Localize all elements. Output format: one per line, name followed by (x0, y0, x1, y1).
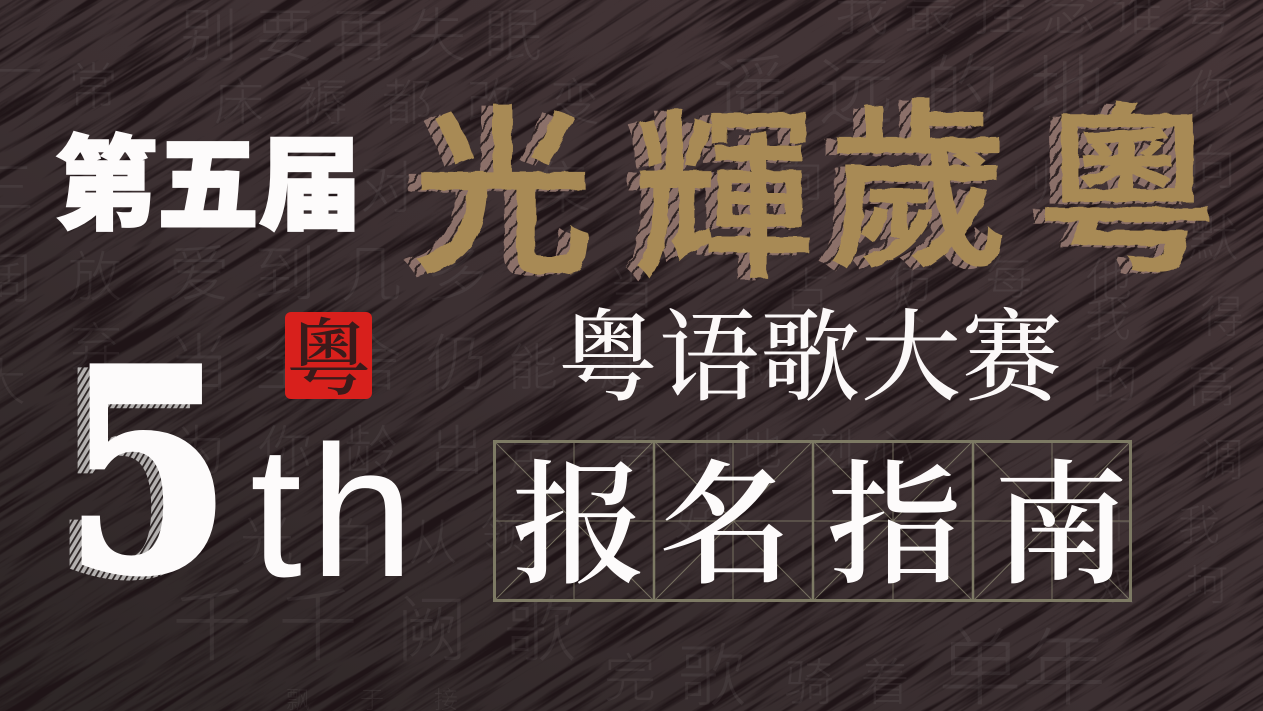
background: ghost lyric characters: 歌 (504, 591, 576, 671)
background: ghost lyric characters: 弃 (70, 320, 122, 378)
heading: 报名指南: 名 (659, 453, 793, 601)
background: ghost lyric characters: 当 (608, 262, 654, 314)
background: ghost lyric characters: 你 (1188, 66, 1234, 118)
background: ghost lyric characters: 好 (675, 496, 719, 545)
background: ghost lyric characters: 集 (535, 157, 591, 220)
background: ghost lyric characters: 能 (508, 340, 558, 396)
background: ghost lyric characters: 我 (1178, 502, 1220, 549)
background: ghost lyric characters: 光 (240, 512, 294, 572)
background: ghost lyric characters: 龄 (344, 422, 398, 482)
heading: 第五届: 第五届 (55, 129, 361, 243)
red seal with 粵: 粵 (286, 314, 371, 407)
background: ghost lyric characters: 完 (604, 651, 656, 709)
background: ghost lyric characters: 遥远的地 (712, 50, 1136, 135)
background: ghost lyric characters: 千千 (172, 582, 384, 671)
subtitle: 粤语歌大赛: 粤语歌大赛 (558, 303, 1065, 414)
title shadow: 粵 (1024, 93, 1206, 297)
heading: 报名指南 (512, 453, 1128, 601)
background: ghost lyric characters: 他 (1086, 254, 1132, 306)
heading: 报名指南: 报 (512, 453, 646, 601)
big numeral 5 with hatched shadow: 5 (52, 311, 220, 640)
background: ghost lyric characters: 就 (740, 338, 786, 390)
main title: 光輝歲粵 with hatched shadow (400, 87, 1218, 303)
background: ghost lyric characters: 别要再失眠 (180, 4, 560, 69)
background: ghost lyric characters: 坷 (1186, 562, 1228, 609)
background: ghost lyric characters: 为 (172, 422, 226, 482)
heading: 报名指南: 南 (994, 453, 1128, 601)
background: ghost lyric characters: 双 (1095, 565, 1135, 609)
title face (412, 87, 1218, 301)
background: ghost lyric characters: 地 (738, 426, 782, 475)
background: ghost lyric characters: 刻 (810, 426, 854, 475)
background: ghost lyric characters: 从 (408, 515, 458, 571)
background: ghost lyric characters: 调 (1198, 434, 1244, 486)
ordinal suffix th: th (250, 407, 422, 616)
background: ghost lyric characters: 归 (1030, 158, 1078, 211)
title face: 光 (412, 93, 594, 297)
background: ghost lyric characters: 放 (68, 248, 122, 308)
米字格 grid frame (494, 441, 1131, 601)
title shadow (400, 89, 1206, 303)
title shadow: 歲 (815, 89, 997, 293)
background: ghost lyric characters: 出 (430, 422, 484, 482)
background: ghost lyric characters: 占 (784, 264, 830, 316)
background: ghost lyric characters: 向 (1188, 142, 1236, 195)
background: ghost lyric characters: 爱到几多 (168, 241, 512, 310)
background: ghost lyric characters: 领 (480, 508, 526, 560)
background: ghost lyric characters: 着 (860, 655, 910, 711)
background: ghost lyric characters: 骑 (784, 655, 834, 711)
background: ghost lyric characters: 开 (1090, 500, 1132, 547)
background: ghost lyric characters: 高 (1188, 360, 1236, 413)
background: ghost lyric characters: 向 (776, 154, 824, 207)
background: ghost lyric characters: 阙 (396, 591, 468, 671)
background: ghost lyric characters: 曲 (690, 428, 736, 480)
big numeral 5 with hatched shadow: 5 (64, 307, 232, 636)
background: ghost lyric characters: 床褥都改变 (214, 75, 634, 131)
background: ghost lyric characters: 每 (986, 252, 1032, 304)
background: ghost lyric characters: 心 (870, 426, 914, 475)
background: ghost lyric characters: 声 (508, 428, 554, 480)
title face: 輝 (633, 97, 815, 301)
title shadow: 光 (400, 95, 582, 299)
background: ghost lyric characters: 得 (1200, 293, 1244, 342)
background: ghost lyric characters: 赴 (600, 343, 646, 395)
background: ghost lyric characters: 常 (68, 59, 118, 115)
background: ghost lyric characters: 人 (880, 278, 926, 330)
background: ghost lyric characters: 我 (1085, 294, 1131, 346)
background: ghost lyric characters: 对 (360, 157, 416, 220)
background: ghost lyric characters: 你 (258, 422, 312, 482)
background: ghost lyric characters: 仿 (888, 256, 934, 308)
background: ghost lyric characters: 当全舍仍 (168, 330, 512, 399)
background: ghost lyric characters: 吉 (612, 426, 658, 478)
background: ghost lyric characters: 的 (1092, 356, 1138, 408)
background: ghost lyric characters: 自 (326, 515, 376, 571)
title shadow: 輝 (621, 99, 803, 303)
heading: 报名指南: 指 (827, 453, 961, 601)
title face: 粵 (1036, 91, 1218, 295)
background: ghost lyric characters: 默 (1188, 211, 1238, 267)
title face: 歲 (827, 87, 1009, 291)
